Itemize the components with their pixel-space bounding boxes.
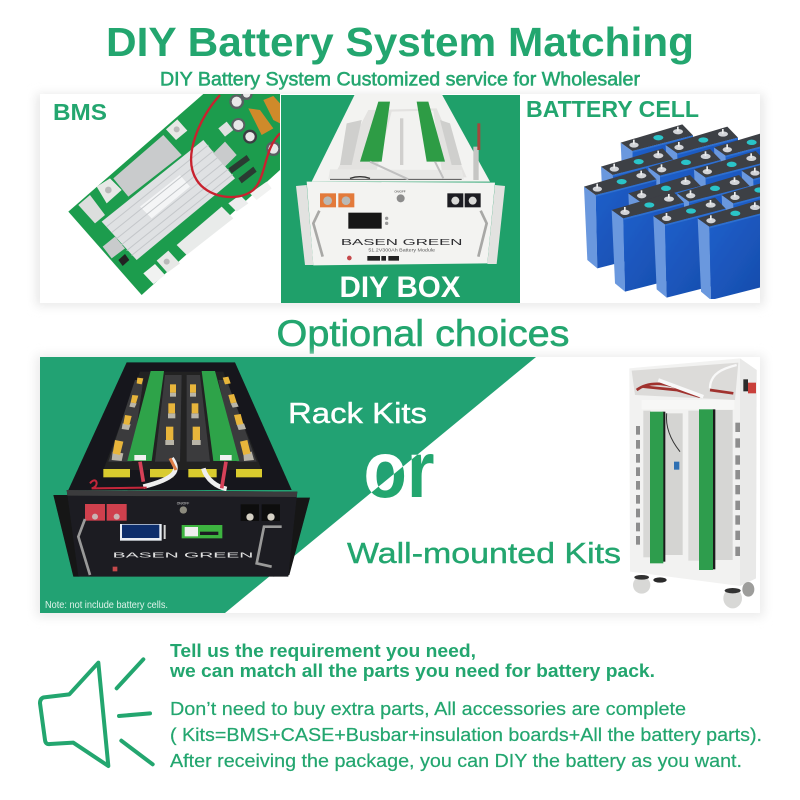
subtitle: DIY Battery System Customized service for Wholesaler <box>160 70 641 90</box>
illustration: DIY box module: 51.2V300Ah Battery Module <box>368 248 436 253</box>
illustration: wall-mounted kit <box>629 358 757 608</box>
word: or (white part): or <box>364 425 434 514</box>
text block: kit details: ( Kits=BMS+CASE+Busbar+insulation boards+All the battery parts). <box>170 725 762 745</box>
label: rack kits: Rack Kits <box>288 398 427 430</box>
text block: kit details <box>170 699 762 771</box>
word: or (green part): or <box>364 425 434 514</box>
note: Note: not include battery cells. <box>45 599 168 611</box>
illustration: DIY box module <box>296 94 505 265</box>
text block: requirement: we can match all the parts you need for battery pack. <box>169 661 655 681</box>
text block: requirement: Tell us the requirement you need, <box>170 641 476 661</box>
label: wall-mounted kits: Wall-mounted Kits <box>347 538 621 570</box>
heading: BMS: BMS <box>53 99 107 125</box>
text block: kit details: After receiving the package, you can DIY the battery as you want. <box>170 751 742 771</box>
heading: optional choices: Optional choices <box>276 313 570 354</box>
text block: kit details: Don’t need to buy extra parts, All accessories are complete <box>170 699 686 719</box>
illustration: rack kit <box>53 362 310 577</box>
heading: DIY box: DIY BOX <box>340 271 460 304</box>
panel: DIY box <box>281 95 520 303</box>
panel: product row <box>36 88 800 306</box>
panel: battery cell illustration <box>584 124 760 299</box>
text block: requirement <box>169 641 655 681</box>
illustration: rack kit: ON/OFF <box>177 501 189 505</box>
green diagonal background <box>40 357 536 613</box>
panel: BMS <box>68 88 281 295</box>
panel: kit options <box>36 355 764 617</box>
logo text: Basen Green: BASEN GREEN <box>341 238 463 247</box>
heading: battery cell: BATTERY CELL <box>526 96 699 122</box>
title: DIY Battery System Matching <box>106 19 694 65</box>
illustration: DIY box module: ON/OFF <box>394 189 406 193</box>
icon: speaker <box>40 659 153 766</box>
logo text: rack kit: BASEN GREEN <box>113 551 253 560</box>
